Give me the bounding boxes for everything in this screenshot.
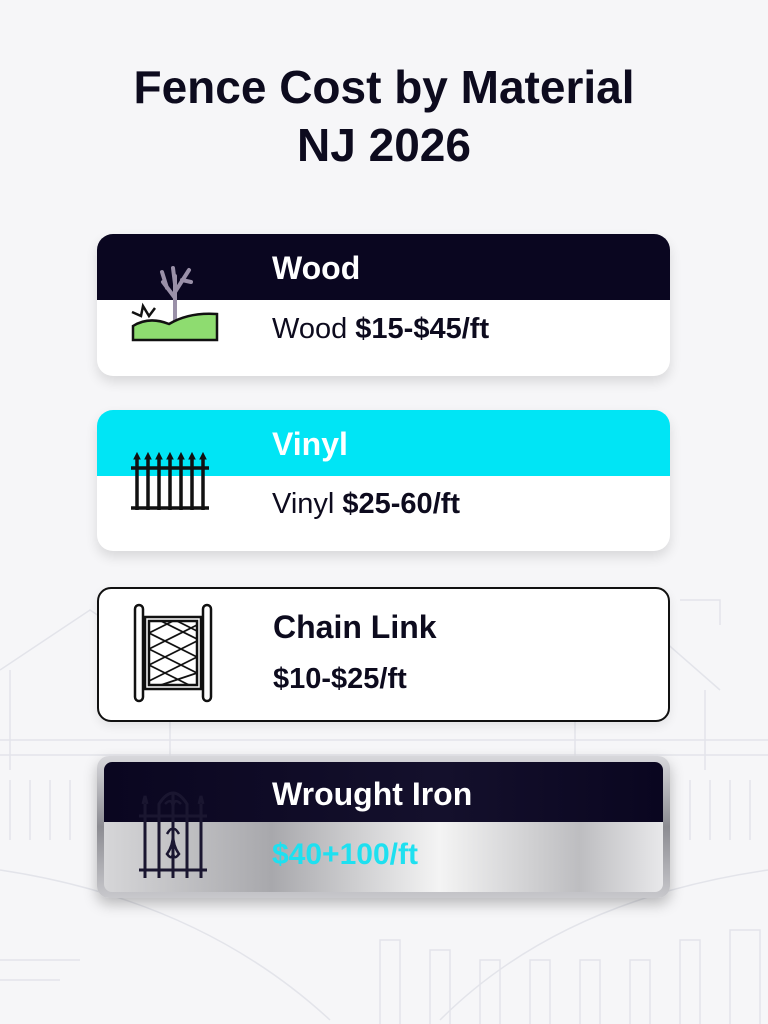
icon: tree on hill bbox=[132, 266, 218, 342]
price: wood: Wood $15-$45/ft bbox=[272, 313, 489, 345]
panel: vinyl bbox=[97, 410, 670, 551]
heading: Chain Link: Chain Link bbox=[273, 609, 437, 645]
heading: Wrought Iron: Wrought Iron bbox=[272, 776, 472, 812]
price: wrought iron: $40+100/ft bbox=[272, 838, 418, 871]
heading: Vinyl: Vinyl bbox=[272, 426, 348, 462]
heading: Wood: Wood bbox=[272, 250, 360, 286]
panel: wood bbox=[97, 234, 670, 376]
price: chain link: $10-$25/ft bbox=[273, 663, 407, 695]
panel: wrought iron bbox=[97, 756, 670, 898]
background: house line drawings bbox=[0, 599, 768, 1024]
title: Fence Cost by Material bbox=[133, 61, 635, 113]
title: NJ 2026 bbox=[297, 119, 471, 171]
price: vinyl: Vinyl $25-60/ft bbox=[272, 488, 460, 520]
title bbox=[133, 61, 635, 171]
icon: picket fence bbox=[131, 452, 209, 510]
icon: ornate iron gate bbox=[139, 792, 207, 878]
icon: chain link gate bbox=[134, 604, 212, 702]
panel: chain link bbox=[97, 587, 670, 722]
